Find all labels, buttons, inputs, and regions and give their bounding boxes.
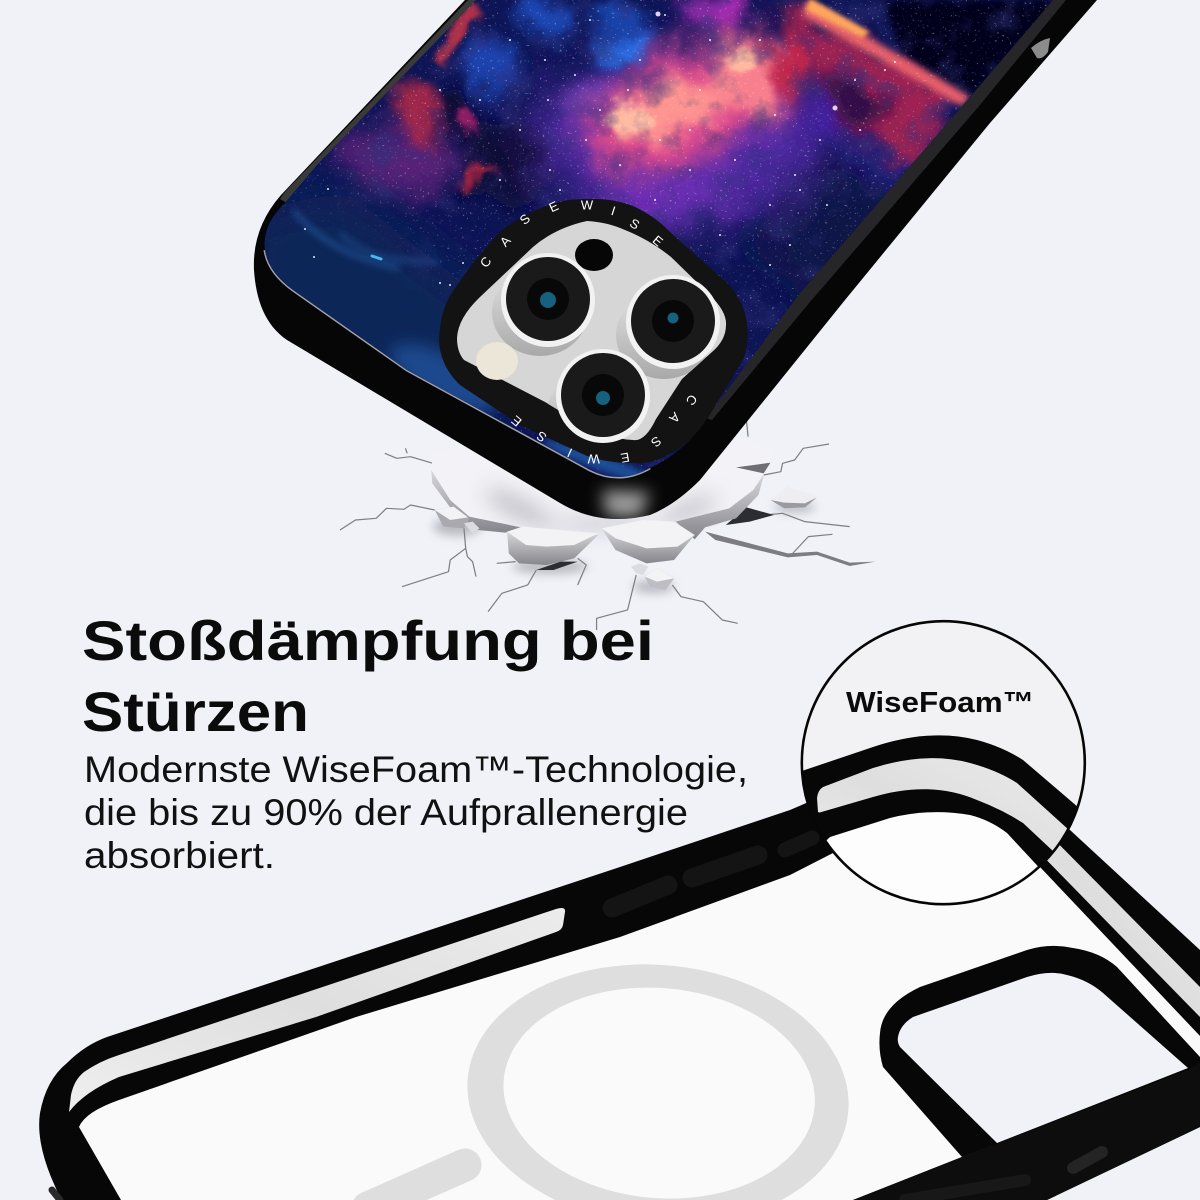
black case frame: [39, 760, 1200, 1200]
black bumper: [439, 199, 748, 463]
left raised plate: [431, 440, 609, 527]
flash: [476, 342, 518, 380]
pink nebula core: [567, 12, 813, 198]
centre slab one: [507, 527, 598, 565]
case shell: [254, 0, 1097, 519]
hairline cracks: [340, 420, 850, 630]
planet body glow: [780, 0, 967, 170]
body text: die bis zu 90% der Aufprallenergie: [84, 792, 688, 833]
lens three: [556, 349, 650, 443]
side button slots: [52, 838, 1102, 1200]
clear back panel: [79, 820, 1200, 1200]
camera cutout opening: [898, 973, 1188, 1143]
camera ring: [439, 198, 748, 466]
crater: cracked wall impact: [340, 420, 876, 630]
stars: [305, 15, 895, 285]
blue clouds top: [454, 0, 660, 112]
circle outline: [802, 621, 1085, 904]
microphone: [575, 239, 613, 271]
title: Stürzen: [82, 680, 309, 743]
dust speckle: [250, 0, 1070, 220]
circle fill: [802, 621, 1085, 904]
right raised plate: [650, 437, 770, 522]
purple haze: [345, 0, 869, 221]
artwork rim line: [265, 250, 650, 477]
brand text bottom: CASEWISE: [508, 392, 700, 466]
bright lavender edge reflection: [680, 415, 712, 455]
callout label: WiseFoam™: [846, 687, 1034, 719]
centre slab two: [602, 520, 695, 563]
right plate wedge: [736, 463, 770, 473]
zoom callout circle: [800, 620, 1086, 906]
body text: [84, 749, 748, 876]
red clouds left: [384, 0, 494, 185]
magsafe alignment pill: [368, 1165, 465, 1200]
lens one: [501, 253, 595, 347]
title: [82, 609, 654, 743]
clear case, inside view: [39, 760, 1200, 1200]
left plate side wall: [431, 470, 521, 533]
grey inner bevel on right side: [706, 0, 1066, 420]
brand text top: CASEWISE: [477, 198, 666, 270]
right plate side wall: [676, 473, 764, 539]
turbulent nebula blobs: [345, 0, 967, 300]
camera cutout frame: [879, 946, 1200, 1157]
left grey rim: [280, 0, 476, 203]
button highlight: [1031, 38, 1050, 58]
lens bases: [492, 299, 707, 410]
dark crevice: [726, 507, 774, 525]
rock shadows: [433, 502, 815, 593]
side glare: [602, 490, 650, 518]
clean lower-left navy swirl: [240, 190, 659, 490]
small rocks: [435, 487, 817, 590]
magsafe ring: [456, 949, 860, 1200]
body text: Modernste WiseFoam™-Technologie,: [84, 749, 748, 790]
body text: absorbiert.: [84, 835, 275, 876]
lower right band: [853, 1063, 1200, 1200]
galaxy artwork: [240, 0, 1070, 490]
dark lanes: [435, 89, 950, 300]
impact shading around phone: [481, 482, 720, 534]
left foam strip: [69, 908, 565, 1112]
wedge crack right: [705, 532, 876, 566]
silver camera plateau: [457, 221, 726, 440]
limb highlight: [802, 0, 970, 106]
magnified rim: [803, 735, 1077, 902]
right foam strip: [1030, 825, 1200, 1017]
lens two: [626, 275, 720, 369]
phone with galaxy case: [240, 0, 1097, 519]
dark corner upper right: [882, 0, 1060, 98]
title: Stoßdämpfung bei: [82, 609, 654, 672]
dark cloud texture: [362, 0, 1053, 469]
